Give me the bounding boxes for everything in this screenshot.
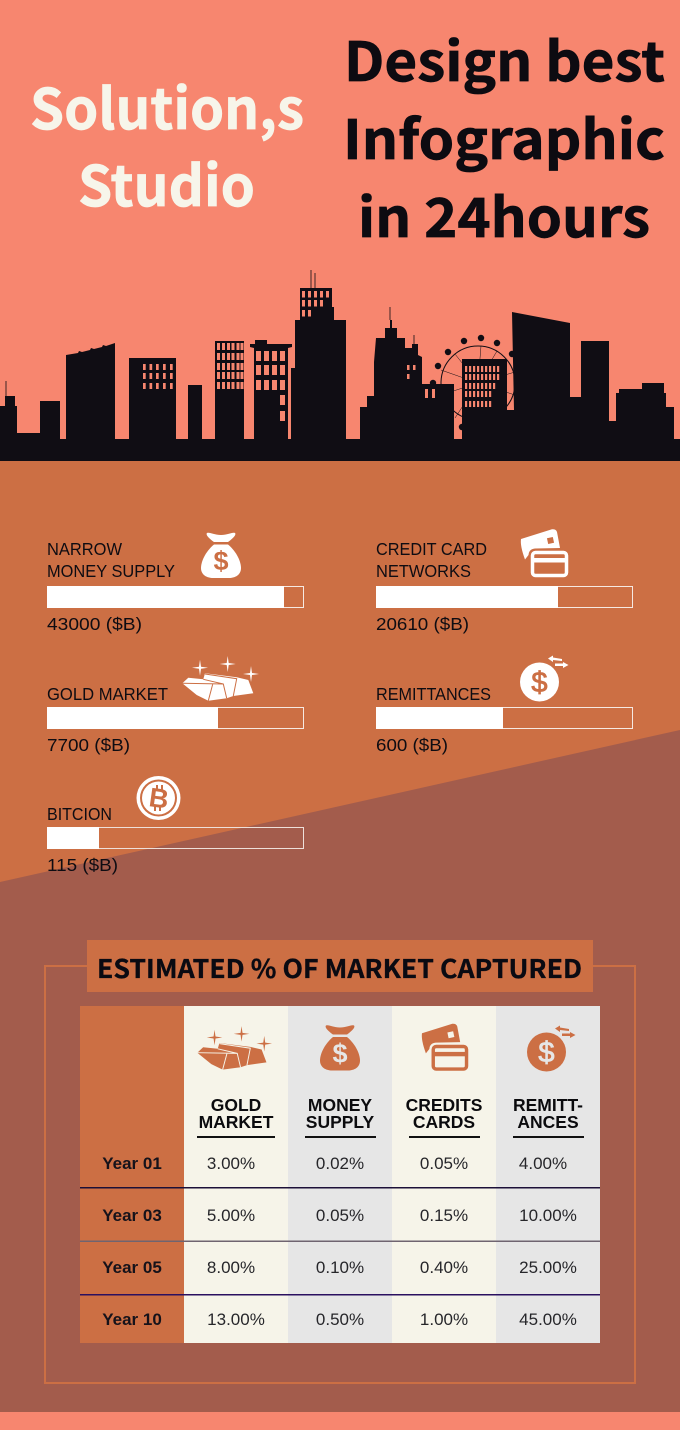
value: 115 ($B) — [47, 855, 118, 875]
column header: money supply: SUPPLY — [306, 1112, 375, 1132]
panel: narrow money supply — [47, 533, 304, 634]
column header: remittances — [513, 1026, 584, 1138]
bar — [47, 707, 304, 729]
icon: credit cards — [521, 529, 566, 576]
column header: credits cards: CARDS — [413, 1112, 475, 1132]
value: 7700 ($B) — [47, 735, 130, 755]
column header: gold market: GOLD — [211, 1095, 261, 1115]
label: NETWORKS — [376, 561, 471, 581]
background: copper section — [0, 461, 680, 886]
row: year 10: 45.00% — [519, 1310, 577, 1329]
row: year 10: 1.00% — [420, 1310, 468, 1329]
row: year 01: Year 01 — [102, 1154, 162, 1173]
heading: Design best Infographic in 24hours — [343, 18, 665, 253]
value: 43000 ($B) — [47, 614, 142, 634]
background: bottom strip — [0, 1412, 680, 1430]
column header: gold market — [197, 1026, 275, 1138]
label: GOLD MARKET — [47, 684, 168, 704]
bar — [47, 586, 304, 608]
heading: Design best Infographic in 24hours: Design best — [344, 18, 665, 97]
row: year 03: 0.05% — [316, 1206, 364, 1225]
label: BITCION — [47, 804, 112, 824]
icon: gold bars — [182, 656, 259, 701]
row: year 05: Year 05 — [102, 1258, 162, 1277]
row: year 05: 0.10% — [316, 1258, 364, 1277]
label: NARROW — [47, 539, 122, 559]
value: 600 ($B) — [376, 735, 448, 755]
label: MONEY SUPPLY — [47, 561, 175, 581]
row: year 01: 0.05% — [420, 1154, 468, 1173]
table columns — [80, 1006, 600, 1343]
heading: Solution,s Studio: Studio — [78, 142, 255, 223]
row: year 03: 10.00% — [519, 1206, 577, 1225]
heading: Solution,s Studio: Solution,s — [30, 65, 304, 146]
row: year 03: 0.15% — [420, 1206, 468, 1225]
bar — [376, 586, 632, 608]
label: CREDIT CARD — [376, 539, 487, 559]
frame around market table — [45, 966, 635, 1383]
buildings — [0, 288, 680, 461]
panel: bitcoin — [47, 776, 304, 875]
row: year 05: 25.00% — [519, 1258, 577, 1277]
row: year 05: 0.40% — [420, 1258, 468, 1277]
building windows — [143, 291, 499, 421]
row: year 10: 0.50% — [316, 1310, 364, 1329]
bar — [47, 827, 304, 849]
column header: credits cards: CREDITS — [406, 1095, 482, 1115]
column header: remittances: REMITT- — [513, 1095, 583, 1115]
column header: remittances: ANCES — [517, 1112, 579, 1132]
city skyline silhouette — [0, 270, 680, 461]
row: year 05 — [102, 1258, 577, 1277]
row: year 01: 0.02% — [316, 1154, 364, 1173]
background: brown diagonal section — [0, 730, 680, 1412]
row: year 03: Year 03 — [102, 1206, 162, 1225]
row: year 03 — [102, 1206, 577, 1225]
bar — [376, 707, 632, 729]
row: year 01 — [102, 1154, 567, 1173]
row: year 01: 3.00% — [207, 1154, 255, 1173]
heading: Design best Infographic in 24hours: Infographic — [343, 96, 665, 175]
icon: bitcoin: B — [147, 782, 171, 815]
column header: gold market: MARKET — [199, 1112, 274, 1132]
panel: remittances — [376, 656, 632, 755]
row: year 01: 4.00% — [519, 1154, 567, 1173]
background: salmon header — [0, 0, 680, 462]
panel: gold market — [47, 656, 304, 755]
column header: credits cards — [406, 1024, 482, 1138]
value: 20610 ($B) — [376, 614, 469, 634]
row: year 10 — [102, 1310, 577, 1329]
row: year 10: 13.00% — [207, 1310, 265, 1329]
antennas — [6, 270, 414, 396]
row: year 10: Year 10 — [102, 1310, 162, 1329]
heading: Solution,s Studio — [30, 65, 304, 223]
row: year 05: 8.00% — [207, 1258, 255, 1277]
label — [47, 539, 175, 581]
section title: estimated % of market captured — [87, 940, 593, 992]
label — [376, 539, 487, 581]
section title: estimated % of market captured: ESTIMATED % OF MARKET CAPTURED — [97, 949, 582, 986]
row: year 03: 5.00% — [207, 1206, 255, 1225]
panel: credit card networks — [376, 529, 632, 634]
table: market captured — [80, 1006, 600, 1343]
heading: Design best Infographic in 24hours: in 24hours — [358, 174, 650, 253]
column header: money supply: MONEY — [308, 1095, 372, 1115]
icon: dollar coin with arrows — [520, 656, 568, 702]
icon: bitcoin — [136, 776, 180, 820]
icon: money bag — [201, 533, 241, 578]
column header: money supply — [305, 1025, 376, 1138]
label: REMITTANCES — [376, 684, 491, 704]
ferris wheel — [430, 335, 515, 430]
